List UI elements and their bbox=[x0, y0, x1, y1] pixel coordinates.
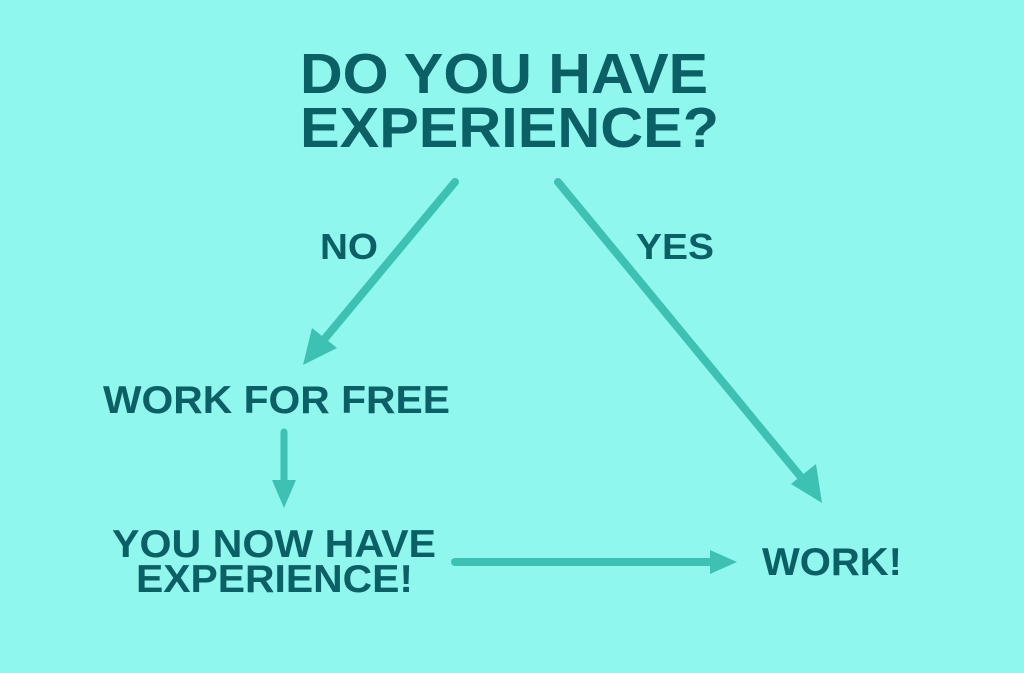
arrow: no bbox=[303, 182, 455, 365]
step: work for free: WORK FOR FREE bbox=[103, 379, 450, 422]
step: you now have experience: EXPERIENCE! bbox=[136, 558, 413, 601]
result: work: WORK! bbox=[762, 541, 902, 584]
title bbox=[300, 42, 719, 160]
label: no: NO bbox=[320, 226, 378, 267]
step: you now have experience: YOU NOW HAVE bbox=[112, 523, 436, 566]
arrow: right bbox=[455, 550, 737, 574]
label: yes: YES bbox=[636, 226, 714, 267]
step: you now have experience bbox=[112, 523, 436, 601]
title: DO YOU HAVE bbox=[300, 42, 708, 106]
arrow: down bbox=[272, 432, 296, 508]
arrow: yes bbox=[558, 182, 822, 503]
title: EXPERIENCE? bbox=[300, 96, 719, 160]
